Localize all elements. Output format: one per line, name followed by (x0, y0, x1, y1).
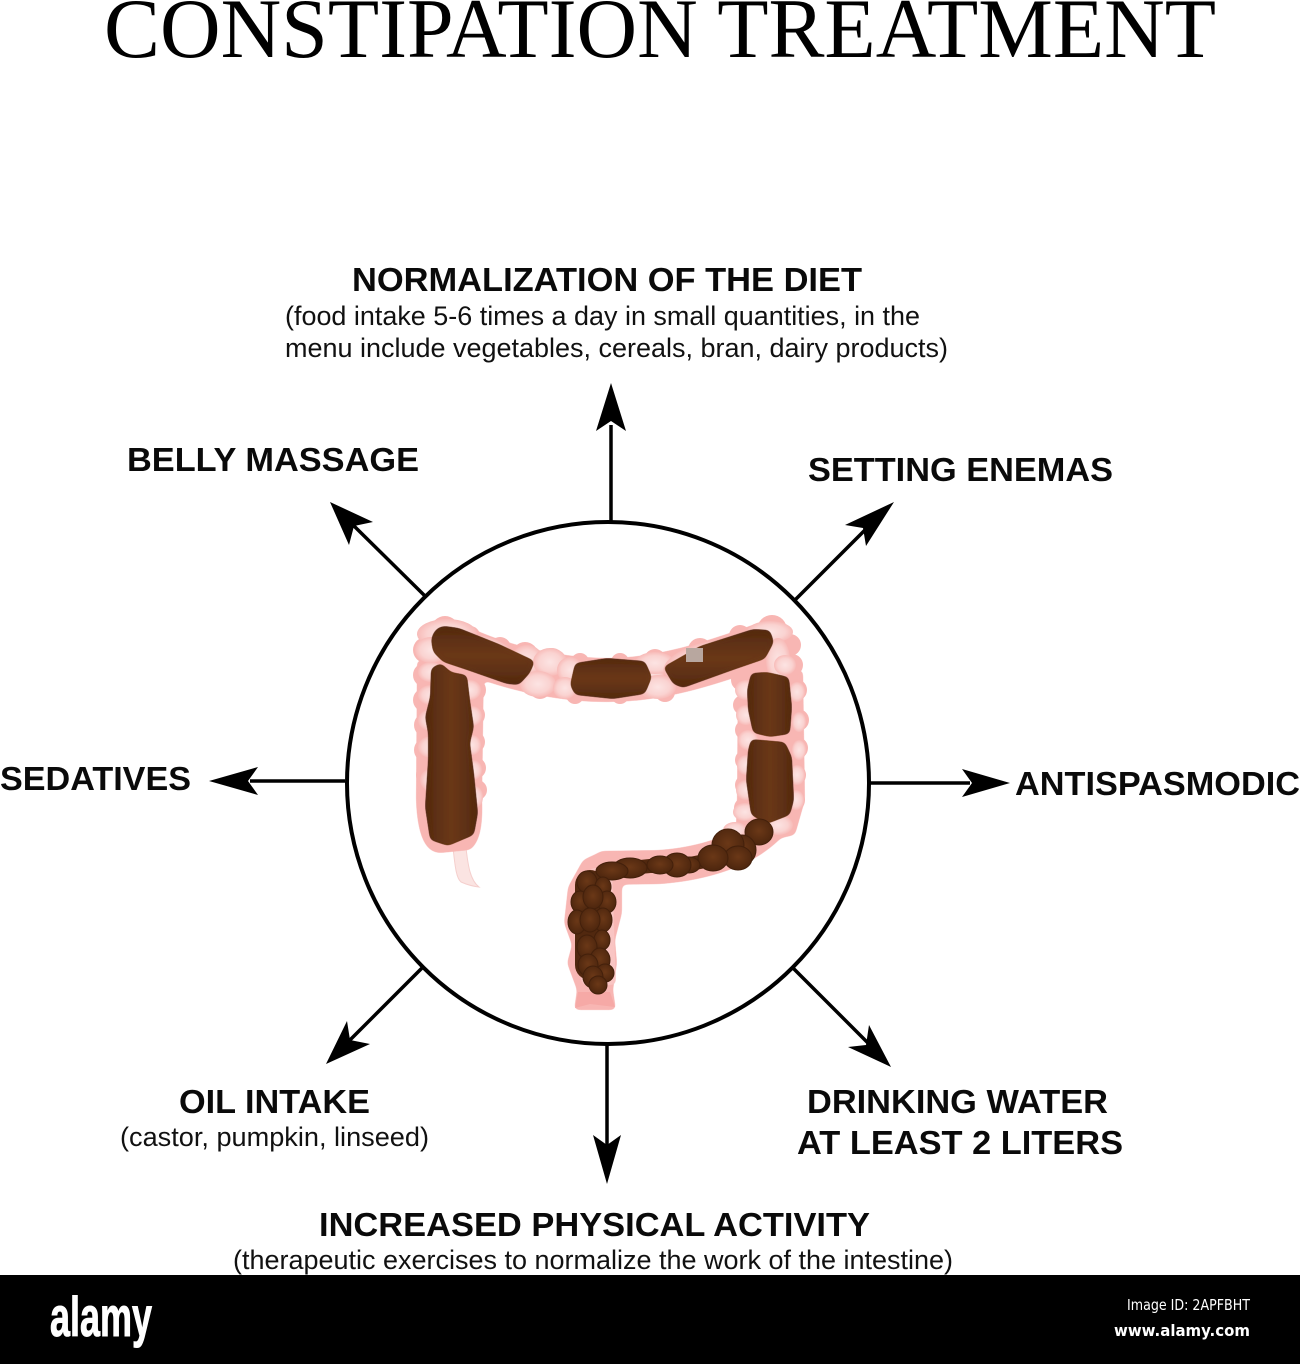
appendix (453, 848, 479, 887)
arrow: right (869, 769, 1010, 797)
stool pieces: large (425, 626, 794, 846)
label: normalization of the diet: NORMALIZATION OF THE DIET (352, 261, 862, 298)
haustra: transverse (461, 629, 519, 671)
arrow: up (596, 383, 626, 522)
arrow: left (209, 767, 345, 795)
label: oil intake: (castor, pumpkin, linseed) (120, 1122, 429, 1152)
footer logo: alamy (50, 1285, 152, 1348)
label: oil intake (120, 1083, 429, 1152)
footer image id: Image ID: 2APFBHT (1127, 1296, 1251, 1314)
label: increased physical activity (233, 1206, 953, 1275)
label: normalization of the diet (285, 261, 948, 363)
central circle (347, 522, 869, 1044)
colon wall (413, 615, 809, 1010)
arrow: down left (326, 968, 422, 1064)
scalloped outer edge (413, 615, 809, 835)
haustra: descending (735, 680, 757, 700)
label: drinking water (797, 1083, 1123, 1161)
footer bar (0, 1275, 1300, 1364)
label: drinking water: DRINKING WATER (807, 1083, 1108, 1120)
label: antispasmodic: ANTISPASMODIC (1015, 765, 1300, 802)
arrow: up left (330, 502, 425, 596)
label: increased physical activity: INCREASED PHYSICAL ACTIVITY (319, 1206, 870, 1243)
watermark patch (686, 648, 703, 662)
stool pieces: small pellets (568, 819, 773, 994)
haustra: ascending (417, 619, 477, 649)
arrow: down right (793, 968, 891, 1067)
label: increased physical activity: (therapeutic exercises to normalize the work of the intestine) (233, 1245, 953, 1275)
colon illustration (413, 615, 809, 1010)
arrow: down (593, 1044, 621, 1184)
label: normalization of the diet: (food intake 5-6 times a day in small quantities, in the (285, 301, 920, 331)
label: drinking water: AT LEAST 2 LITERS (797, 1124, 1123, 1161)
footer url: www.alamy.com (1114, 1321, 1250, 1340)
label: normalization of the diet: menu include vegetables, cereals, bran, dairy products) (285, 333, 948, 363)
label: belly massage: BELLY MASSAGE (127, 441, 419, 478)
pellet core (590, 832, 759, 985)
label: sedatives: SEDATIVES (0, 760, 191, 797)
label: oil intake: OIL INTAKE (179, 1083, 370, 1120)
arrow: up right (795, 502, 894, 600)
label: setting enemas: SETTING ENEMAS (808, 451, 1113, 488)
